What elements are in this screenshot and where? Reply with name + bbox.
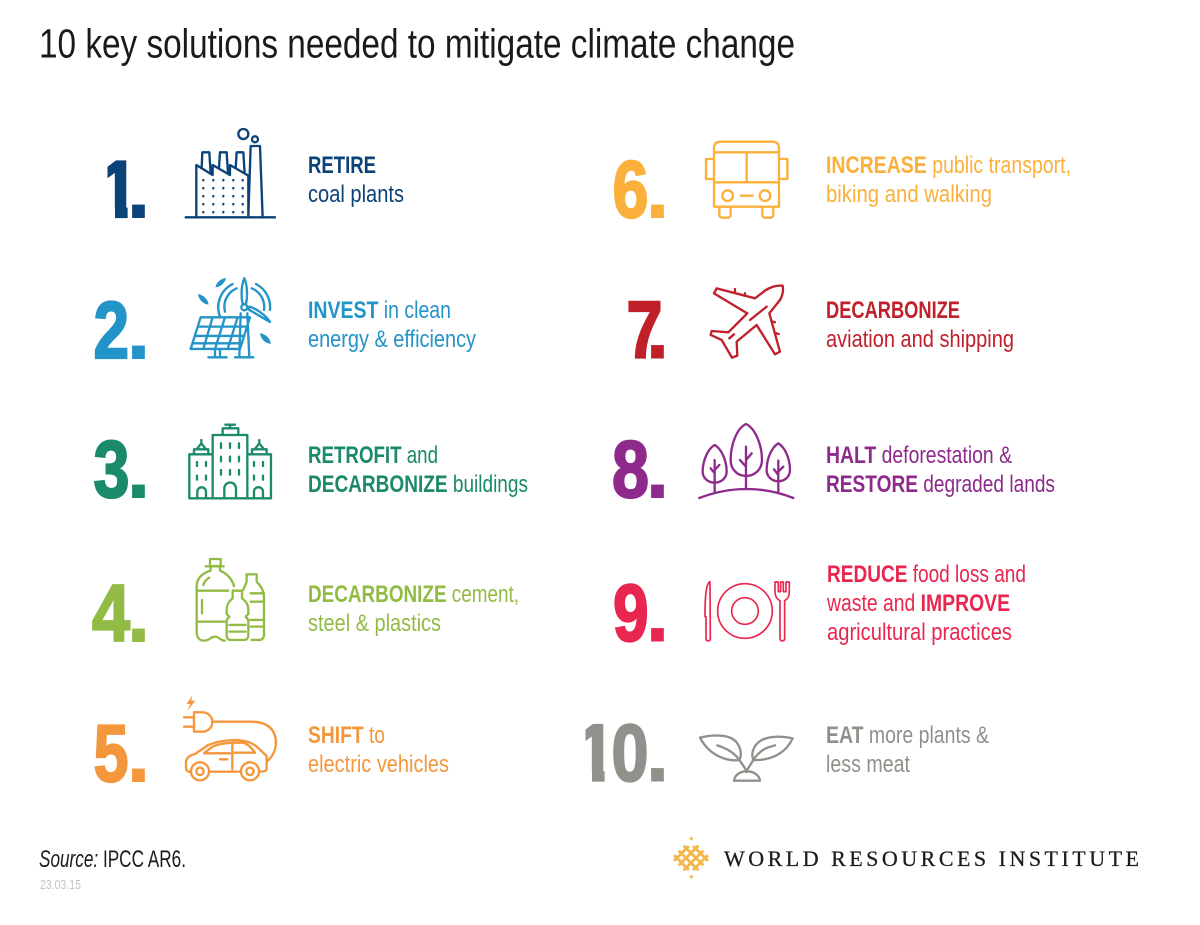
- label: [826, 297, 1014, 353]
- item 10: eat more plants: [586, 723, 989, 783]
- number 7: .: [645, 278, 670, 378]
- icon: buildings: [189, 425, 271, 498]
- logo wordmark: WORLD RESOURCES INSTITUTE: [724, 846, 1139, 871]
- number 1: .: [126, 138, 151, 238]
- number 4: .: [126, 562, 151, 662]
- number 10: 1: [576, 708, 615, 798]
- label: [826, 722, 989, 778]
- number 9: .: [645, 562, 670, 662]
- label: HALT deforestation &: [826, 442, 1012, 469]
- label: INCREASE public transport,: [826, 152, 1071, 179]
- item 4: decarbonize cement steel plastics: [92, 559, 519, 662]
- number 3: .: [126, 418, 151, 518]
- item 1: retire coal plants: [108, 128, 404, 218]
- icon: plate, knife and fork: [705, 582, 789, 641]
- label: waste and IMPROVE: [826, 590, 1010, 617]
- label: DECARBONIZE cement,: [308, 581, 519, 608]
- number 4: [92, 562, 151, 662]
- number 5: 5: [94, 709, 128, 799]
- item 9: reduce food loss: [613, 561, 1026, 662]
- number 2: 2: [94, 286, 129, 376]
- title: 10 key solutions needed to mitigate climate change: [39, 20, 795, 66]
- icon: trees on a hill: [699, 424, 793, 498]
- date stamp: 23.03.15: [40, 877, 81, 892]
- number 10: 0: [612, 708, 648, 798]
- label: [826, 442, 1055, 498]
- number 8: [612, 418, 670, 518]
- label: [308, 442, 528, 498]
- icon: electric car with plug: [184, 696, 276, 780]
- number 6: .: [645, 138, 670, 238]
- number 10: .: [645, 702, 670, 802]
- label: energy & efficiency: [308, 326, 476, 353]
- label: RETIRE: [308, 152, 376, 179]
- item 3: retrofit buildings: [94, 418, 528, 518]
- number 9: 9: [613, 568, 649, 658]
- item 5: shift to electric vehicles: [94, 696, 449, 802]
- item 8: halt deforestation: [612, 418, 1055, 518]
- number 10: [586, 723, 664, 783]
- label: DECARBONIZE buildings: [308, 471, 528, 498]
- label: coal plants: [308, 181, 404, 208]
- item 2: invest in clean energy: [94, 278, 476, 379]
- icon: coal plant factory: [186, 129, 275, 217]
- label: [308, 297, 476, 353]
- label: [826, 561, 1026, 646]
- icon: bottles: [197, 559, 264, 641]
- number 1: 1: [100, 145, 138, 235]
- number 4: 4: [92, 569, 130, 659]
- label: electric vehicles: [308, 751, 449, 778]
- number 6: 6: [612, 145, 648, 235]
- icon: solar panel and wind turbine: [191, 278, 271, 357]
- number 5: .: [126, 702, 151, 802]
- logo: World Resources Institute: [670, 837, 1139, 879]
- label: [308, 722, 449, 778]
- number 2: .: [126, 279, 151, 379]
- label: steel & plastics: [308, 610, 441, 637]
- label: REDUCE food loss and: [827, 561, 1026, 588]
- label: INVEST in clean: [308, 297, 451, 324]
- icon: airplane: [711, 286, 783, 358]
- item 6: increase public transport: [612, 138, 1071, 238]
- label: SHIFT to: [308, 722, 385, 749]
- number 3: 3: [94, 425, 130, 515]
- label: DECARBONIZE: [826, 297, 960, 324]
- number 7: 7: [626, 286, 662, 376]
- logo mark: woven diamond: [670, 837, 712, 879]
- label: agricultural practices: [827, 619, 1012, 646]
- label: EAT more plants &: [826, 722, 989, 749]
- label: [826, 152, 1071, 208]
- item 7: decarbonize aviation and shipping: [626, 278, 1014, 378]
- icon: sprout: [700, 735, 793, 781]
- number 8: .: [645, 418, 670, 518]
- number 1: [108, 160, 145, 218]
- label: RESTORE degraded lands: [826, 471, 1055, 498]
- label: aviation and shipping: [826, 326, 1014, 353]
- label: [308, 152, 404, 208]
- label: biking and walking: [826, 181, 992, 208]
- icon: bus: [706, 142, 787, 218]
- label: [308, 581, 519, 637]
- number 8: 8: [612, 425, 649, 515]
- source note: Source: IPCC AR6.: [39, 846, 186, 873]
- label: RETROFIT and: [308, 442, 438, 469]
- label: less meat: [826, 751, 910, 778]
